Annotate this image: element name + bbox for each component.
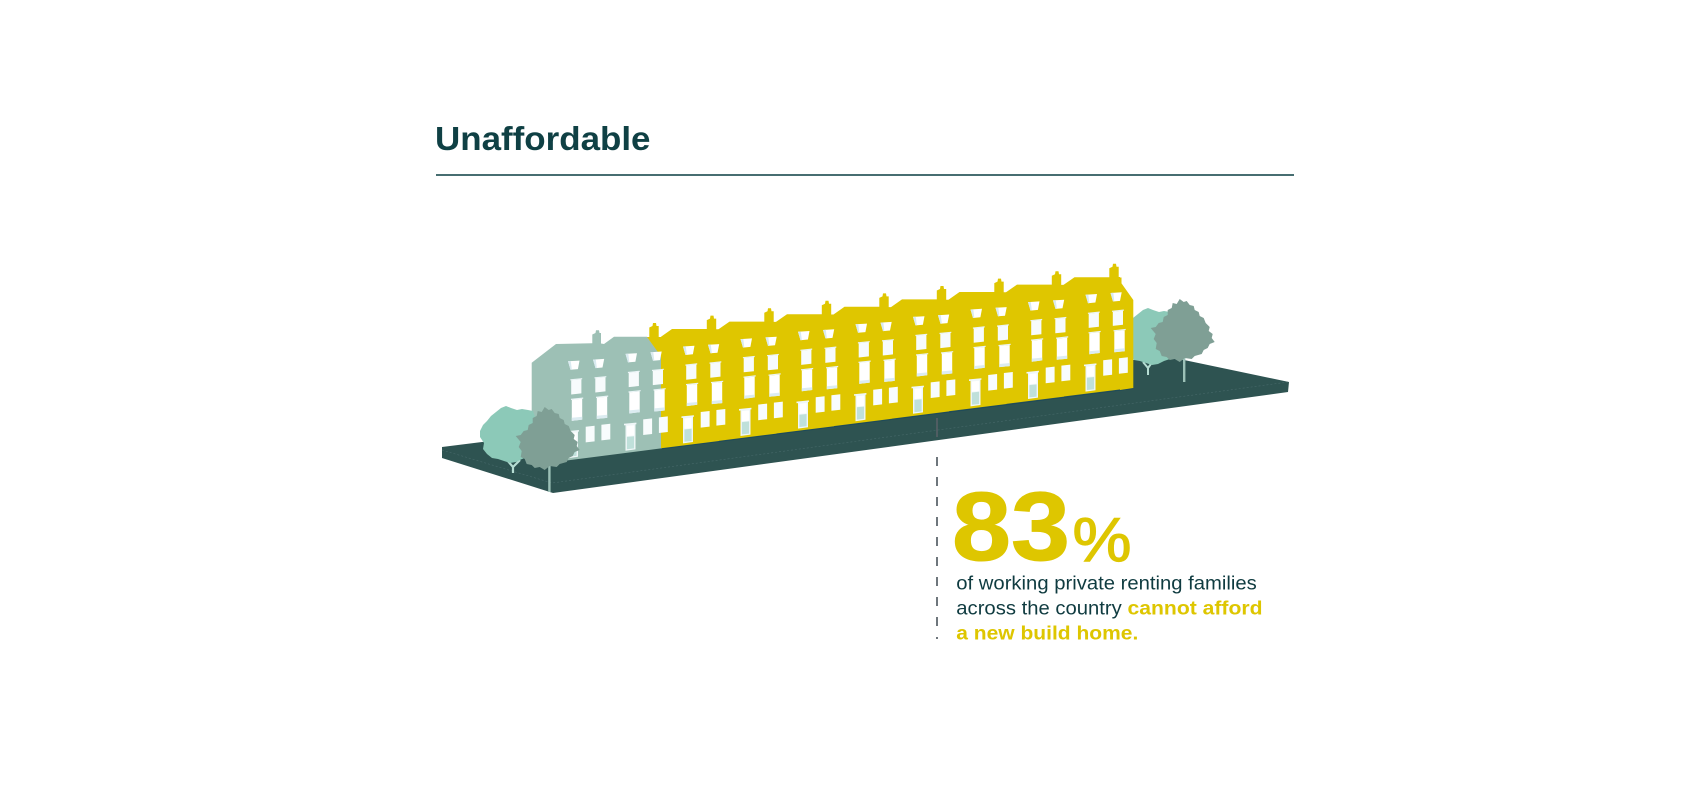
title: Unaffordable: [435, 120, 650, 157]
back right tree: mint: [1122, 308, 1180, 375]
grey-green houses (affordable): [532, 330, 662, 465]
description text: of working private renting families: [956, 572, 1257, 594]
statistic: 83%: [952, 472, 1132, 581]
front left tree: grey: [516, 407, 580, 492]
ground slab: [442, 356, 1289, 493]
statistic: 83%: %: [1072, 506, 1132, 575]
description text: cannot afford: [1128, 597, 1262, 619]
description text: across the country: [956, 597, 1122, 619]
title rule: [436, 174, 1294, 176]
statistic: 83%: 83: [952, 472, 1070, 581]
house windows and doors: [566, 292, 1128, 458]
description text: a new build home.: [956, 622, 1138, 644]
front left tree: mint: [480, 406, 538, 473]
right tree: grey: [1151, 299, 1215, 382]
dashed leader line: [936, 418, 938, 639]
yellow houses (unaffordable): [647, 264, 1133, 448]
description text: [956, 572, 1262, 644]
